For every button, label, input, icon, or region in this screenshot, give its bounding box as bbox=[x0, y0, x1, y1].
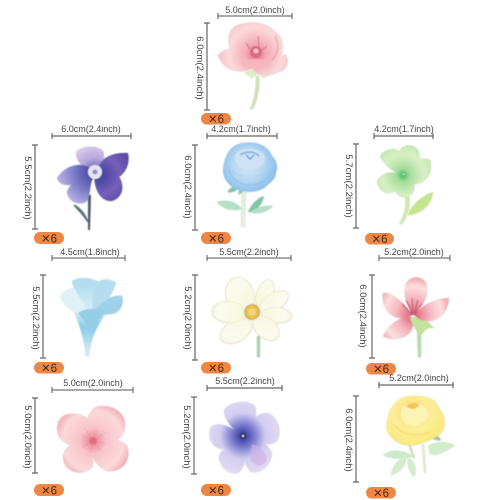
width dimension: 5.2cm(2.0inch) bbox=[389, 373, 449, 383]
height dimension: 5.5cm(2.2inch) bbox=[30, 286, 41, 350]
width dimension: 5.5cm(2.2inch) bbox=[219, 247, 279, 257]
flower sticker 3: blue peony bbox=[182, 124, 277, 246]
quantity badge: ✕6 bbox=[208, 363, 224, 375]
width dimension: 6.0cm(2.4inch) bbox=[61, 124, 121, 134]
quantity badge: ✕6 bbox=[41, 234, 57, 246]
flower sticker 8: pink blossom bbox=[22, 378, 133, 498]
flower illustration: pink lily bbox=[383, 277, 449, 357]
height dimension: 6.0cm(2.4inch) bbox=[182, 155, 193, 219]
width dimension: 4.2cm(1.7inch) bbox=[211, 124, 271, 134]
height dimension: 6.0cm(2.4inch) bbox=[343, 408, 354, 472]
height dimension: 5.2cm(2.0inch) bbox=[181, 405, 192, 469]
quantity badge: ✕6 bbox=[373, 488, 389, 500]
flower sticker 2: purple flower bbox=[22, 124, 131, 246]
height dimension: 6.0cm(2.4inch) bbox=[194, 36, 205, 100]
flower sticker 1: pink poppy bbox=[194, 5, 292, 126]
width dimension: 5.2cm(2.0inch) bbox=[384, 247, 444, 257]
width dimension: 5.5cm(2.2inch) bbox=[215, 376, 275, 386]
quantity badge: ✕6 bbox=[208, 114, 224, 126]
flower sticker 4: green flower bbox=[343, 124, 434, 246]
flower illustration: pink blossom bbox=[57, 406, 128, 473]
height dimension: 5.0cm(2.0inch) bbox=[22, 405, 33, 469]
flower sticker 5: blue trumpet flower bbox=[30, 247, 125, 375]
flower sticker 7: pink lily bbox=[357, 247, 450, 376]
flower illustration: blue peony bbox=[217, 142, 277, 227]
flower sticker 10: yellow peony bbox=[343, 373, 455, 500]
flower illustration: white daisy bbox=[211, 274, 293, 357]
quantity badge: ✕6 bbox=[371, 234, 388, 246]
quantity badge: ✕6 bbox=[41, 363, 57, 375]
height dimension: 5.7cm(2.2inch) bbox=[343, 154, 354, 218]
height dimension: 5.5cm(2.2inch) bbox=[22, 156, 33, 220]
quantity badge: ✕6 bbox=[373, 364, 389, 376]
flower illustration: purple flower bbox=[57, 147, 129, 230]
height dimension: 6.0cm(2.4inch) bbox=[357, 284, 368, 348]
quantity badge: ✕6 bbox=[41, 486, 57, 498]
quantity badge: ✕6 bbox=[208, 486, 224, 498]
flower sticker 9: violet pansy bbox=[181, 376, 282, 498]
width dimension: 4.2cm(1.7inch) bbox=[374, 124, 434, 134]
width dimension: 5.0cm(2.0inch) bbox=[63, 378, 123, 388]
flower sticker 6: white daisy bbox=[182, 247, 293, 375]
flower illustration: green flower bbox=[377, 145, 433, 224]
width dimension: 4.5cm(1.8inch) bbox=[60, 247, 120, 257]
height dimension: 5.2cm(2.0inch) bbox=[182, 286, 193, 350]
flower illustration: violet pansy bbox=[209, 402, 279, 473]
flower illustration: blue trumpet flower bbox=[60, 278, 123, 356]
flower illustration: yellow peony bbox=[383, 396, 455, 477]
flower illustration: pink poppy bbox=[218, 22, 288, 109]
width dimension: 5.0cm(2.0inch) bbox=[225, 5, 285, 15]
quantity badge: ✕6 bbox=[208, 234, 224, 246]
